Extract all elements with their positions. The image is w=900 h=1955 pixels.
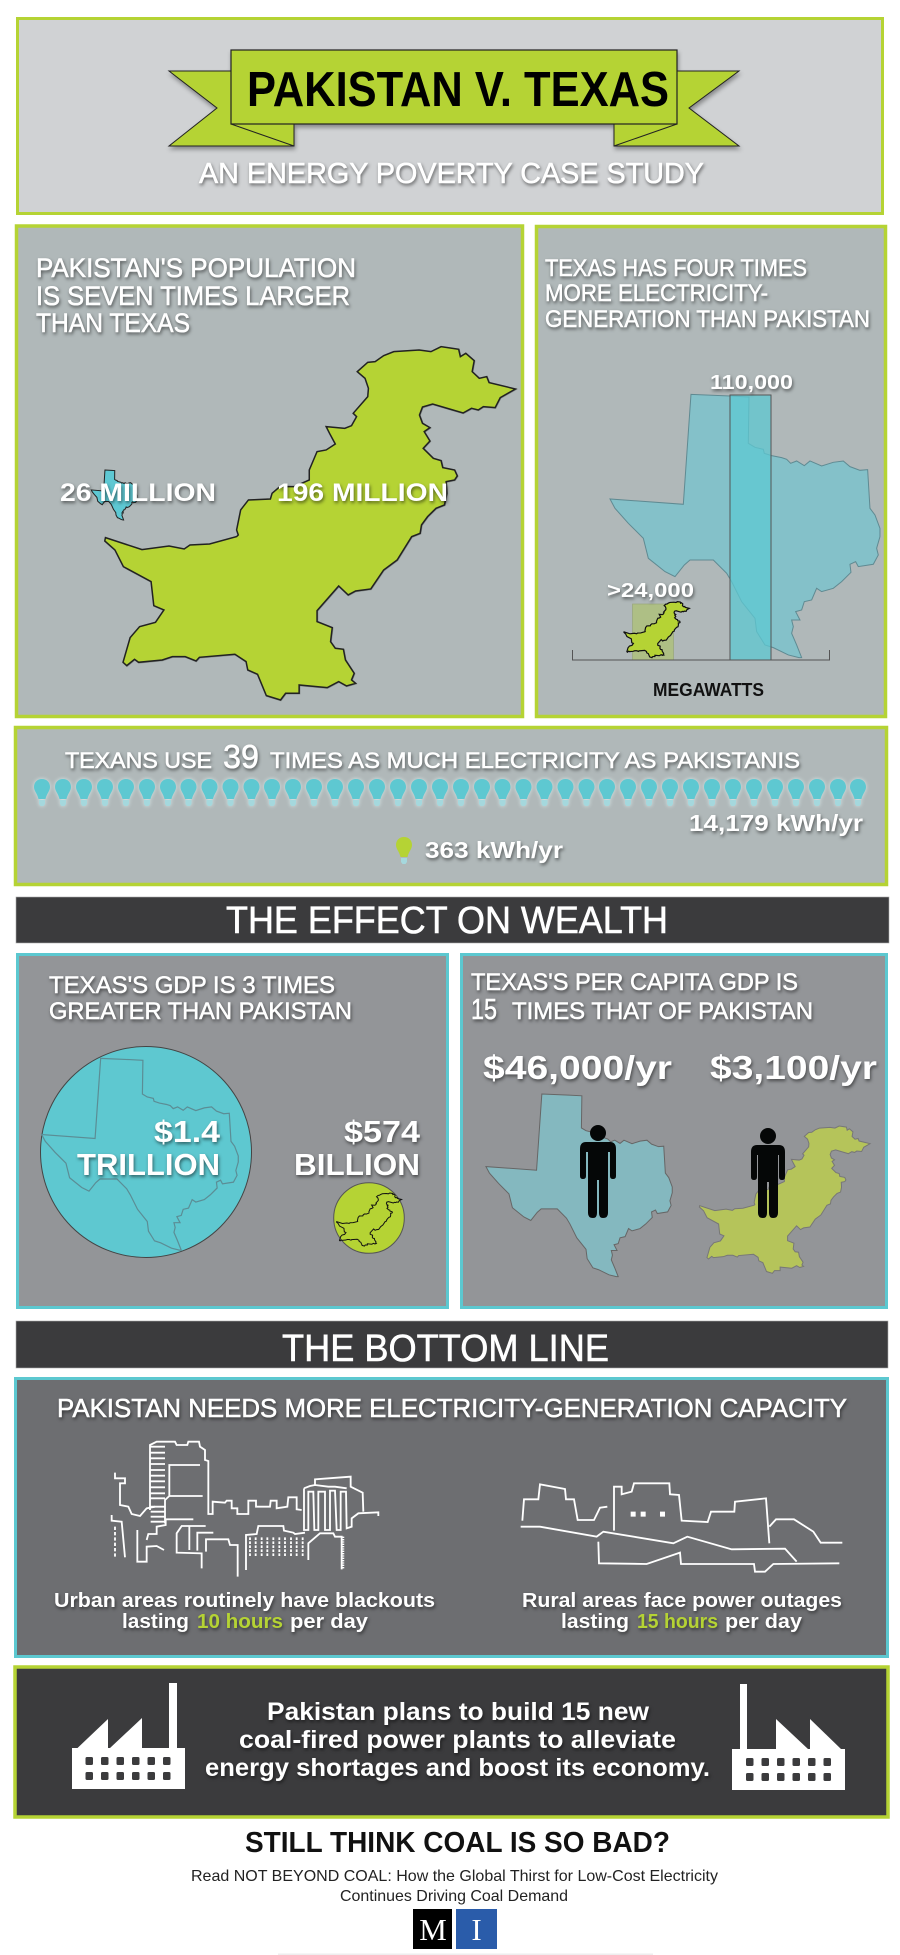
- electricity heading: TIMES AS MUCH ELECTRICITY AS PAKISTANIS: [270, 748, 800, 773]
- panel: per capita GDP: [462, 954, 886, 1308]
- logo: MI: M: [419, 1912, 447, 1947]
- electricity heading: [65, 738, 800, 775]
- icon: factory right: [732, 1684, 845, 1790]
- generation heading: [545, 255, 870, 333]
- coal plans text: energy shortages and boost its economy.: [205, 1754, 710, 1782]
- population heading: THAN TEXAS: [36, 308, 190, 338]
- footer text: Read NOT BEYOND COAL: How the Global Thirst for Low-Cost Electricity: [191, 1868, 718, 1885]
- footer text: Continues Driving Coal Demand: [340, 1888, 568, 1905]
- panel: GDP: [18, 954, 448, 1308]
- GDP heading: TEXAS'S GDP IS 3 TIMES: [49, 972, 335, 999]
- coal plans text: coal-fired power plants to alleviate: [239, 1726, 676, 1754]
- generation heading: TEXAS HAS FOUR TIMES: [545, 255, 807, 282]
- map: Texas large: [610, 394, 880, 658]
- axis: [572, 650, 830, 660]
- panel: electricity use: [16, 728, 886, 884]
- subtitle: AN ENERGY POVERTY CASE STUDY: [199, 158, 704, 190]
- icon: person Pakistan: [751, 1128, 785, 1218]
- label: Pakistan per capita: $3,100/yr: [710, 1049, 877, 1086]
- panel: bottom line: [16, 1378, 888, 1656]
- bottom line heading: PAKISTAN NEEDS MORE ELECTRICITY-GENERATION CAPACITY: [57, 1393, 847, 1423]
- GDP heading: GREATER THAN PAKISTAN: [49, 998, 352, 1025]
- label: $1.4 trillion: [77, 1114, 221, 1182]
- caption: rural: Rural areas face power outages: [522, 1590, 842, 1612]
- title ribbon: [169, 50, 739, 146]
- per capita heading: 15: [471, 994, 497, 1026]
- icon: urban skyline: [112, 1442, 378, 1577]
- panel: population: [16, 226, 522, 716]
- population heading: [36, 253, 356, 338]
- label: $1.4 trillion: TRILLION: [77, 1147, 220, 1182]
- map: Texas small: [91, 470, 137, 520]
- population heading: IS SEVEN TIMES LARGER: [36, 281, 350, 311]
- heading bar: the effect on wealth: [16, 897, 889, 943]
- GDP heading: [49, 972, 352, 1025]
- logo: MI: I: [471, 1912, 482, 1947]
- map: Pakistan small: [624, 602, 689, 658]
- electricity heading: TEXANS USE: [65, 748, 212, 773]
- map: Pakistan: [105, 347, 515, 700]
- circle: Texas GDP: [40, 1046, 252, 1258]
- panel: coal plans: [15, 1667, 888, 1817]
- caption: urban: Urban areas routinely have blackouts: [54, 1590, 435, 1612]
- logo: MI: [413, 1909, 497, 1949]
- icon: factory left: [72, 1683, 185, 1789]
- coal plans text: [205, 1698, 710, 1782]
- coal plans text: Pakistan plans to build 15 new: [267, 1698, 650, 1726]
- label: $574 billion: $574: [344, 1114, 421, 1149]
- population heading: PAKISTAN'S POPULATION: [36, 253, 356, 283]
- title: PAKISTAN V. TEXAS: [247, 63, 669, 117]
- icon: person Texas: [580, 1125, 616, 1218]
- label: 110,000: 110,000: [710, 372, 793, 394]
- generation heading: GENERATION THAN PAKISTAN: [545, 306, 870, 333]
- label: $1.4 trillion: $1.4: [154, 1114, 221, 1149]
- axis label: MEGAWATTS: [653, 680, 764, 700]
- label: Texas per capita: $46,000/yr: [483, 1049, 672, 1086]
- label: Texas kWh: 14,179 kWh/yr: [689, 810, 863, 836]
- label: $574 billion: BILLION: [294, 1147, 420, 1182]
- per capita heading: TIMES THAT OF PAKISTAN: [512, 998, 813, 1025]
- bulbs: Texas: [34, 779, 866, 806]
- map: Texas per capita: [486, 1094, 672, 1277]
- bulb: Pakistan: [396, 837, 412, 864]
- bar: Pakistan capacity: [632, 604, 674, 660]
- electricity heading: 39: [223, 738, 259, 775]
- map: Pakistan per capita: [699, 1126, 870, 1273]
- generation heading: MORE ELECTRICITY-: [545, 280, 768, 307]
- caption: rural: lasting: [561, 1611, 629, 1633]
- caption: rural: 15 hours: [637, 1611, 718, 1633]
- label: 26 million: 26 MILLION: [60, 479, 216, 507]
- per capita heading: TEXAS'S PER CAPITA GDP IS: [471, 969, 798, 996]
- bar: Texas capacity: [730, 395, 771, 660]
- label: Pakistan kWh: 363 kWh/yr: [425, 837, 563, 863]
- label: 196 million: 196 MILLION: [277, 479, 448, 507]
- footer text: [191, 1868, 718, 1905]
- caption: rural: per day: [725, 1611, 803, 1633]
- per capita heading: [471, 969, 813, 1026]
- caption: urban: lasting: [122, 1611, 189, 1633]
- caption: rural: [522, 1590, 842, 1633]
- label: 24,000: >24,000: [607, 580, 694, 602]
- panel: header: [18, 18, 882, 214]
- caption: urban: 10 hours: [197, 1611, 283, 1633]
- caption: urban: [54, 1590, 435, 1633]
- caption: urban: per day: [290, 1611, 369, 1633]
- heading bar: the effect on wealth: THE EFFECT ON WEALTH: [226, 900, 668, 942]
- heading bar: the bottom line: [16, 1321, 888, 1370]
- panel: generation capacity: [536, 226, 886, 716]
- label: $574 billion: [294, 1114, 421, 1182]
- icon: rural skyline: [521, 1483, 842, 1572]
- footer heading: STILL THINK COAL IS SO BAD?: [245, 1827, 670, 1859]
- circle: Pakistan GDP: [334, 1183, 404, 1253]
- heading bar: the bottom line: THE BOTTOM LINE: [282, 1328, 609, 1370]
